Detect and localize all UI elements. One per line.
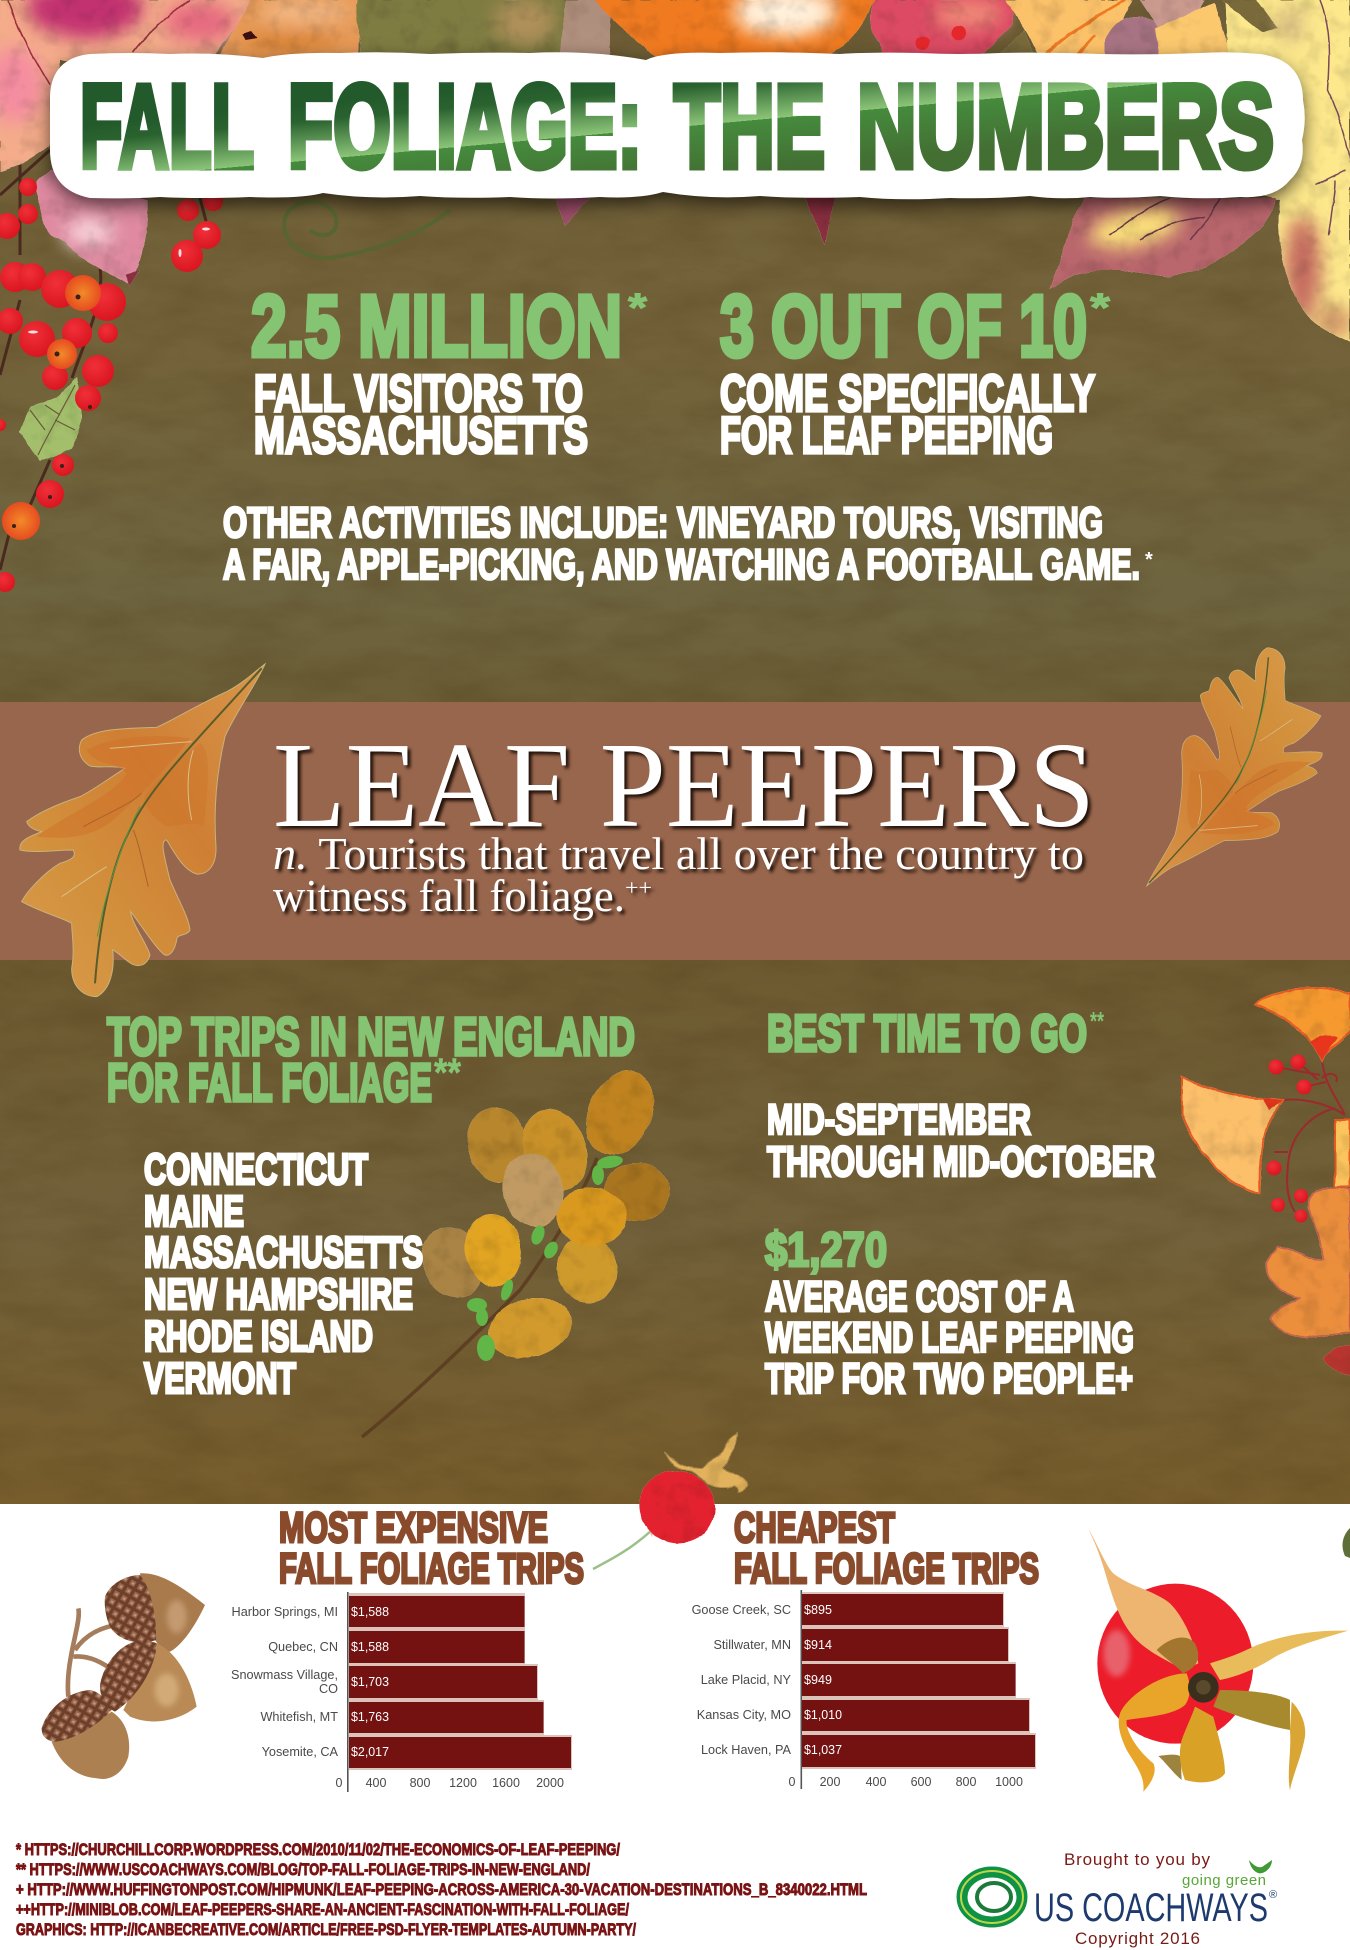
bar chart: most expensive fall foliage trips: 2000 bbox=[536, 1776, 564, 1790]
definition text bbox=[273, 829, 1084, 921]
list of states: CONNECTICUT bbox=[144, 1146, 368, 1194]
bar chart: most expensive fall foliage trips: $1,703 bbox=[351, 1675, 389, 1689]
text block: best time to go: ** bbox=[1090, 1006, 1105, 1036]
illustration: acorns bbox=[42, 1573, 205, 1779]
heading: most expensive trips: MOST EXPENSIVE bbox=[279, 1504, 548, 1552]
text block: average cost: WEEKEND LEAF PEEPING bbox=[765, 1314, 1134, 1362]
text block: best time to go: THROUGH MID-OCTOBER bbox=[767, 1138, 1155, 1186]
bar chart: most expensive fall foliage trips: $1,588 bbox=[351, 1605, 389, 1619]
text block: top trips in New England bbox=[107, 1008, 635, 1403]
list of states: RHODE ISLAND bbox=[144, 1313, 373, 1361]
logo mark: green rings bbox=[961, 1871, 1023, 1923]
illustration: hanging red berries, pink leaf and green leaf bbox=[0, 150, 223, 592]
bar chart: most expensive fall foliage trips: CO bbox=[319, 1682, 338, 1696]
illustration: left oak leaf bbox=[20, 664, 265, 997]
text block: best time to go: MID-SEPTEMBER bbox=[767, 1096, 1031, 1144]
illustration: rosehip flower bbox=[1088, 1528, 1348, 1792]
bar chart: most expensive fall foliage trips: $2,017 bbox=[351, 1745, 389, 1759]
logo: US Coachways sponsor block: going green bbox=[1182, 1872, 1266, 1889]
bar chart: cheapest fall foliage trips: Lake Placid, NY bbox=[701, 1673, 792, 1687]
bar chart: cheapest fall foliage trips: Goose Creek, SC bbox=[692, 1603, 791, 1617]
footnote sources: GRAPHICS: HTTP://ICANBECREATIVE.COM/ARTICLE/FREE-PSD-FLYER-TEMPLATES-AUTUMN-PARTY/ bbox=[16, 1920, 636, 1939]
bar chart: most expensive fall foliage trips: $1,763 bbox=[351, 1710, 389, 1724]
bar chart: most expensive fall foliage trips: Yosemite, CA bbox=[262, 1745, 339, 1759]
definition text: n. Tourists that travel all over the country to bbox=[273, 829, 1084, 879]
illustration: curled green vine bbox=[284, 202, 450, 258]
bar chart: most expensive fall foliage trips: 800 bbox=[410, 1776, 430, 1790]
bar chart: cheapest fall foliage trips: $1,010 bbox=[804, 1708, 842, 1722]
text block: best time to go: BEST TIME TO GO bbox=[767, 1004, 1087, 1062]
bar chart: cheapest fall foliage trips: 1000 bbox=[995, 1775, 1023, 1789]
stat: 3 out of 10: COME SPECIFICALLY bbox=[720, 364, 1095, 422]
bar chart: cheapest fall foliage trips: $949 bbox=[804, 1673, 832, 1687]
stat: 3 out of 10: FOR LEAF PEEPING bbox=[720, 406, 1053, 464]
bar chart: most expensive fall foliage trips: Snowmass Village, bbox=[231, 1668, 338, 1682]
panel: white bottom section background bbox=[0, 1504, 1350, 1950]
stat: 2.5 million visitors: 2.5 MILLION bbox=[251, 278, 622, 375]
bar chart: most expensive fall foliage trips: Whitefish, MT bbox=[260, 1710, 338, 1724]
stat: 3 out of 10: 3 OUT OF 10 bbox=[720, 278, 1087, 375]
title text bbox=[80, 61, 1274, 193]
bar chart: cheapest fall foliage trips: $895 bbox=[804, 1603, 832, 1617]
footnote sources: ** HTTPS://WWW.USCOACHWAYS.COM/BLOG/TOP-FALL-FOLIAGE-TRIPS-IN-NEW-ENGLAND/ bbox=[16, 1860, 590, 1879]
logo: US Coachways sponsor block: US COACHWAYS bbox=[1034, 1886, 1268, 1930]
stat: 2.5 million visitors bbox=[251, 278, 648, 464]
bar chart: cheapest fall foliage trips: $1,037 bbox=[804, 1743, 842, 1757]
footnote sources: * HTTPS://CHURCHILLCORP.WORDPRESS.COM/2010/11/02/THE-ECONOMICS-OF-LEAF-PEEPING/ bbox=[16, 1840, 620, 1859]
bar chart: most expensive fall foliage trips: 1600 bbox=[492, 1776, 520, 1790]
bar chart: cheapest fall foliage trips: 0 bbox=[789, 1775, 796, 1789]
heading: most expensive trips bbox=[279, 1504, 584, 1593]
title text: FALL bbox=[80, 61, 254, 193]
illustration: top foliage garland bbox=[0, 0, 1350, 342]
text block: average cost: AVERAGE COST OF A bbox=[765, 1273, 1074, 1321]
stat: 2.5 million visitors: FALL VISITORS TO bbox=[254, 364, 583, 422]
bar chart: most expensive fall foliage trips: $1,588 bbox=[351, 1640, 389, 1654]
title banner bbox=[50, 52, 1305, 199]
heading: cheapest trips: FALL FOLIAGE TRIPS bbox=[734, 1545, 1039, 1593]
heading: most expensive trips: FALL FOLIAGE TRIPS bbox=[279, 1545, 584, 1593]
illustration: green leaf tip at right edge bbox=[1343, 1528, 1350, 1558]
list of states: MASSACHUSETTS bbox=[144, 1229, 423, 1277]
bar chart: most expensive fall foliage trips: 0 bbox=[336, 1776, 343, 1790]
bar chart: most expensive fall foliage trips: Harbor Springs, MI bbox=[232, 1605, 338, 1619]
illustration: right oak leaf bbox=[1147, 648, 1322, 886]
logo: US Coachways sponsor block: ® bbox=[1269, 1889, 1277, 1901]
stat: 3 out of 10: * bbox=[1090, 286, 1111, 330]
illustration: golden leaf branch bbox=[362, 1060, 670, 1437]
bar chart: cheapest fall foliage trips bbox=[692, 1590, 1036, 1789]
definition text: ++ bbox=[625, 875, 652, 900]
illustration: ginkgo leaves, berries and orange oak leaf on right edge bbox=[1182, 989, 1350, 1375]
logo: US Coachways sponsor block bbox=[961, 1850, 1277, 1948]
text block: average cost bbox=[765, 1224, 1134, 1403]
definition text: witness fall foliage. bbox=[273, 871, 625, 921]
text block: best time to go bbox=[767, 1004, 1155, 1186]
textured olive background bbox=[0, 0, 1350, 1505]
list of states bbox=[144, 1146, 423, 1403]
heading: leaf peepers: LEAF PEEPERS bbox=[273, 718, 1095, 853]
bar chart: cheapest fall foliage trips: Stillwater, MN bbox=[713, 1638, 791, 1652]
stat: 2.5 million visitors: MASSACHUSETTS bbox=[254, 406, 588, 464]
text block: top trips in New England: FOR FALL FOLIAGE bbox=[107, 1054, 432, 1113]
title text: FOLIAGE: bbox=[288, 61, 642, 193]
heading: cheapest trips bbox=[734, 1504, 1039, 1593]
text block: top trips in New England: TOP TRIPS IN NEW ENGLAND bbox=[107, 1008, 635, 1067]
footnote sources: + HTTP://WWW.HUFFINGTONPOST.COM/HIPMUNK/LEAF-PEEPING-ACROSS-AMERICA-30-VACATION-DESTINATIONS_B_8340022.HTML bbox=[16, 1880, 867, 1899]
title text: THE bbox=[674, 61, 825, 193]
text block: average cost: $1,270 bbox=[765, 1224, 887, 1277]
heading: cheapest trips: CHEAPEST bbox=[734, 1504, 895, 1552]
list of states: VERMONT bbox=[144, 1355, 296, 1403]
footnote sources: ++HTTP://MINIBLOB.COM/LEAF-PEEPERS-SHARE-AN-ANCIENT-FASCINATION-WITH-FALL-FOLIAGE/ bbox=[16, 1900, 629, 1919]
text block: top trips in New England: ** bbox=[434, 1051, 461, 1095]
stat: 2.5 million visitors: * bbox=[628, 286, 648, 330]
logo: US Coachways sponsor block: Brought to you by bbox=[1064, 1850, 1210, 1869]
bar chart: most expensive fall foliage trips: Quebec, CN bbox=[268, 1640, 338, 1654]
bar chart: cheapest fall foliage trips: Lock Haven, PA bbox=[701, 1743, 792, 1757]
list of states: NEW HAMPSHIRE bbox=[144, 1271, 413, 1319]
bar chart: cheapest fall foliage trips: 800 bbox=[956, 1775, 976, 1789]
text block: other activities: * bbox=[1145, 549, 1153, 571]
stat: 3 out of 10 bbox=[720, 278, 1111, 464]
bar chart: most expensive fall foliage trips: 400 bbox=[366, 1776, 386, 1790]
bar chart: most expensive fall foliage trips bbox=[231, 1592, 572, 1792]
footnote sources bbox=[16, 1840, 867, 1939]
logo: US Coachways sponsor block: Copyright 2016 bbox=[1075, 1929, 1200, 1948]
illustration: red rosehip with tan sepals bbox=[593, 1432, 747, 1569]
panel: leaf peepers band bbox=[0, 702, 1350, 960]
bar chart: cheapest fall foliage trips: 400 bbox=[866, 1775, 886, 1789]
bar chart: cheapest fall foliage trips: 600 bbox=[911, 1775, 931, 1789]
bar chart: cheapest fall foliage trips: $914 bbox=[804, 1638, 832, 1652]
bar chart: most expensive fall foliage trips: 1200 bbox=[449, 1776, 477, 1790]
text block: other activities bbox=[223, 499, 1153, 589]
bar chart: cheapest fall foliage trips: 200 bbox=[820, 1775, 840, 1789]
bar chart: cheapest fall foliage trips: Kansas City, MO bbox=[697, 1708, 791, 1722]
text block: average cost: TRIP FOR TWO PEOPLE+ bbox=[765, 1355, 1133, 1403]
list of states: MAINE bbox=[144, 1188, 244, 1236]
